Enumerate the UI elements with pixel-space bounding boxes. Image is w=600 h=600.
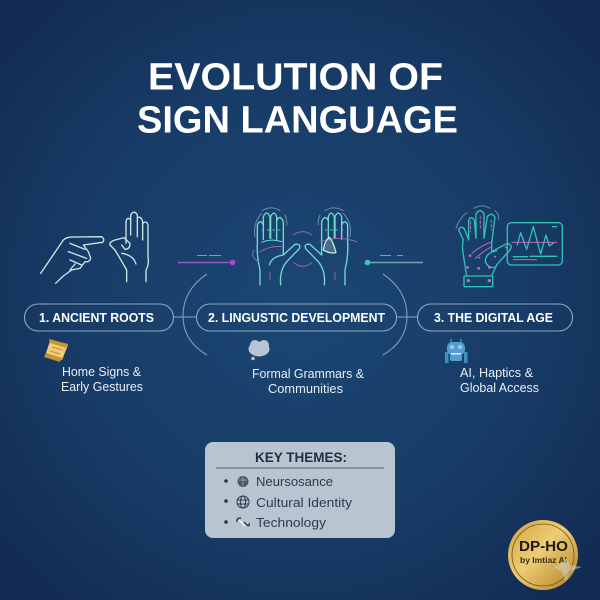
- arrow: teal connector: [365, 256, 423, 265]
- icon: ancient hands: [41, 212, 148, 283]
- text: formal grammars: Formal Grammars &: [252, 367, 365, 381]
- item: neursosance: Neursosance: [256, 474, 333, 489]
- title: EVOLUTION OF: [148, 56, 443, 98]
- text: ai haptics: Global Access: [460, 381, 539, 395]
- pill: linguistic development: 2. LINGUSTIC DEVELOPMENT: [208, 310, 385, 325]
- connector: stage links: [173, 316, 417, 318]
- item: cultural identity: Cultural Identity: [256, 495, 353, 510]
- text: formal grammars: Communities: [268, 382, 343, 396]
- icon: thought cloud: [248, 340, 270, 360]
- item: technology: Technology: [256, 515, 327, 530]
- heading: key themes: KEY THEMES:: [255, 449, 347, 465]
- text: home signs: [61, 365, 143, 394]
- item: technology: [224, 515, 327, 530]
- badge: DP-HO: by Imtiaz AI: [520, 556, 567, 565]
- badge: DP-HO: [508, 520, 582, 590]
- arc: right bracket: [383, 274, 407, 355]
- text: ai haptics: AI, Haptics &: [460, 366, 534, 380]
- pill: ancient roots: [24, 304, 174, 331]
- icon: robot: [445, 339, 468, 363]
- text: formal grammars: [252, 367, 365, 396]
- icon: two open hands: [253, 208, 357, 285]
- pill: linguistic development: [196, 304, 396, 331]
- arc: left bracket: [183, 274, 207, 355]
- icon: scroll: [44, 339, 68, 362]
- icon: robotic glove with monitor: [456, 206, 562, 287]
- text: home signs: Early Gestures: [61, 380, 143, 394]
- pill: digital age: 3. THE DIGITAL AGE: [434, 310, 553, 325]
- title: SIGN LANGUAGE: [137, 100, 458, 142]
- text: ai haptics: [460, 366, 539, 395]
- text: home signs: Home Signs &: [62, 365, 142, 379]
- pill: ancient roots: 1. ANCIENT ROOTS: [39, 310, 154, 325]
- panel: key themes: [205, 442, 395, 538]
- pill: digital age: [418, 304, 572, 331]
- arrow: purple connector: [178, 256, 235, 265]
- badge: DP-HO: DP-HO: [519, 538, 568, 555]
- title: [137, 56, 458, 142]
